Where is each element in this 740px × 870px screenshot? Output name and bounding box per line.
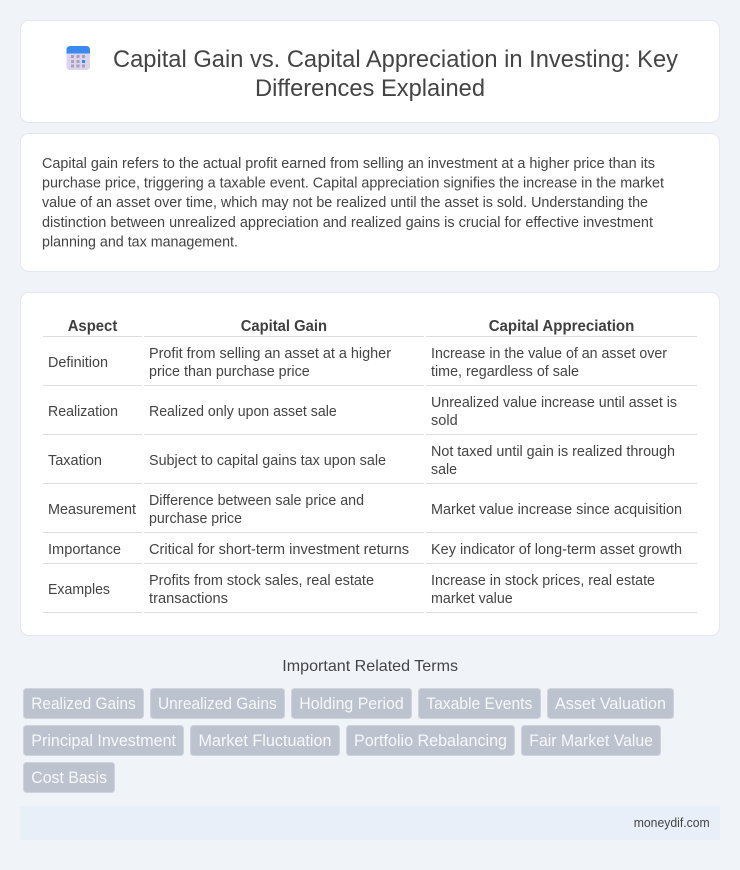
table row: examples: market value (431, 591, 513, 607)
tag: taxable events (418, 688, 540, 718)
icon: calendar (66, 46, 90, 70)
tag: cost basis: Cost Basis (31, 769, 107, 787)
heading: important related terms: Important Related Terms (282, 658, 458, 675)
table row: definition: Increase in the value of an asset over (431, 346, 667, 362)
table row: importance: Key indicator of long-term asset growth (431, 542, 682, 558)
table row: measurement: Market value increase since acquisition (431, 502, 682, 518)
text block: summary paragraph: purchase price, triggering a taxable event. Capital appreciation signifies the increase in the market (42, 176, 664, 192)
table row: realization: Unrealized value increase until asset is (431, 395, 677, 411)
table row: examples: Profits from stock sales, real estate (149, 573, 374, 589)
tag: fair market value: Fair Market Value (529, 732, 653, 750)
table row: definition: Definition (48, 355, 108, 371)
text block: summary paragraph: planning and tax management. (42, 234, 238, 250)
table row: examples: transactions (149, 591, 228, 607)
table header row: Aspect (68, 318, 118, 335)
table row: taxation: sale (431, 462, 457, 478)
table row: examples (48, 573, 655, 607)
tag: asset valuation (548, 688, 674, 718)
table row: realization: Realized only upon asset sale (149, 404, 337, 420)
table row: measurement: Difference between sale price and (149, 493, 364, 509)
table row: taxation (48, 444, 675, 478)
panel: related term tags (24, 688, 674, 792)
tag: realized gains (24, 688, 144, 718)
footer (20, 806, 720, 840)
title: Capital Gain vs. Capital Appreciation in Investing: Key (113, 46, 679, 73)
table row: definition: price than purchase price (149, 364, 310, 380)
table row: definition: time, regardless of sale (431, 364, 579, 380)
tag: market fluctuation: Market Fluctuation (198, 732, 332, 750)
table row: examples: Examples (48, 582, 110, 598)
title (113, 46, 679, 102)
text block: summary paragraph: Capital gain refers to the actual profit earned from selling an investment at a higher price than its (42, 156, 655, 172)
footer: moneydif.com (634, 816, 710, 830)
table row: measurement: purchase price (149, 511, 242, 527)
text block: summary paragraph: value of an asset over time, which may not be realized until the asset is sold. Understanding the (42, 195, 648, 211)
tag: fair market value (522, 726, 660, 756)
tag: holding period (292, 688, 412, 718)
tag: principal investment: Principal Investment (31, 732, 176, 750)
tag: principal investment (24, 726, 184, 756)
tag: realized gains: Realized Gains (31, 695, 136, 713)
table row: definition: Profit from selling an asset at a higher (149, 346, 391, 362)
table row: realization: sold (431, 413, 458, 429)
table row: taxation: Taxation (48, 453, 102, 469)
tag: unrealized gains: Unrealized Gains (158, 695, 277, 713)
table row: importance: Critical for short-term investment returns (149, 542, 409, 558)
table row: measurement: Measurement (48, 502, 136, 518)
table row: realization (48, 395, 677, 429)
panel: comparison table (20, 292, 720, 636)
panel: introduction text (20, 134, 720, 272)
table row: definition (48, 346, 667, 380)
tag: cost basis (24, 762, 114, 792)
tag: market fluctuation (190, 726, 340, 756)
table row: examples: Increase in stock prices, real estate (431, 573, 655, 589)
table row: taxation: Not taxed until gain is realized through (431, 444, 675, 460)
title: Differences Explained (255, 75, 485, 102)
text block: summary paragraph: distinction between unrealized appreciation and realized gains is crucial for effective investment (42, 215, 653, 231)
tag: portfolio rebalancing (346, 726, 514, 756)
tag: asset valuation: Asset Valuation (555, 695, 666, 713)
panel: title header (20, 20, 720, 122)
tag: portfolio rebalancing: Portfolio Rebalancing (354, 732, 507, 750)
tag: holding period: Holding Period (299, 695, 404, 713)
table row: measurement (48, 493, 682, 527)
table row: importance: Importance (48, 542, 121, 558)
table row: importance (48, 542, 682, 558)
table header row: Capital Gain (241, 318, 327, 335)
table row: realization: Realization (48, 404, 118, 420)
text block: summary paragraph (42, 156, 664, 250)
table header row: Capital Appreciation (489, 318, 634, 335)
tag: taxable events: Taxable Events (426, 695, 532, 713)
tag: unrealized gains (150, 688, 284, 718)
table header row (68, 318, 634, 335)
table row: taxation: Subject to capital gains tax upon sale (149, 453, 386, 469)
